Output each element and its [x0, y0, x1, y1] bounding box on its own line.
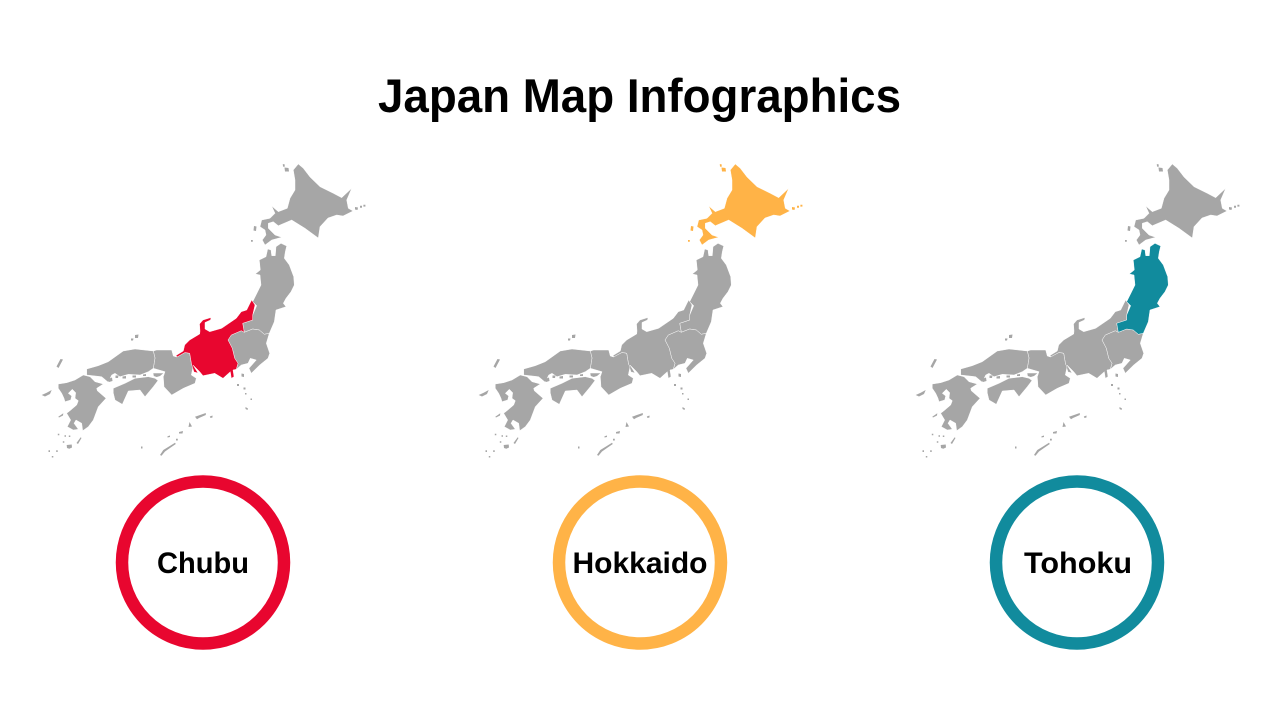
grey regions of Japan [479, 243, 731, 458]
badge: Chubu [122, 482, 284, 644]
map: Tohoku highlighted [916, 164, 1239, 458]
region: Chubu [176, 300, 255, 378]
map: Chubu highlighted [42, 164, 365, 458]
region: Hokkaido [688, 164, 802, 245]
badge: Hokkaido [559, 482, 721, 644]
label: Tohoku: Tohoku [1024, 547, 1132, 580]
grey regions of Japan [42, 164, 365, 458]
region: Tohoku [1117, 243, 1168, 334]
title: Japan Map Infographics [378, 69, 901, 122]
grey regions of Japan [916, 164, 1239, 458]
label: Hokkaido: Hokkaido [572, 547, 708, 580]
label: Chubu: Chubu [157, 547, 249, 580]
map: Hokkaido highlighted [479, 164, 802, 458]
badge: Tohoku [996, 482, 1158, 644]
